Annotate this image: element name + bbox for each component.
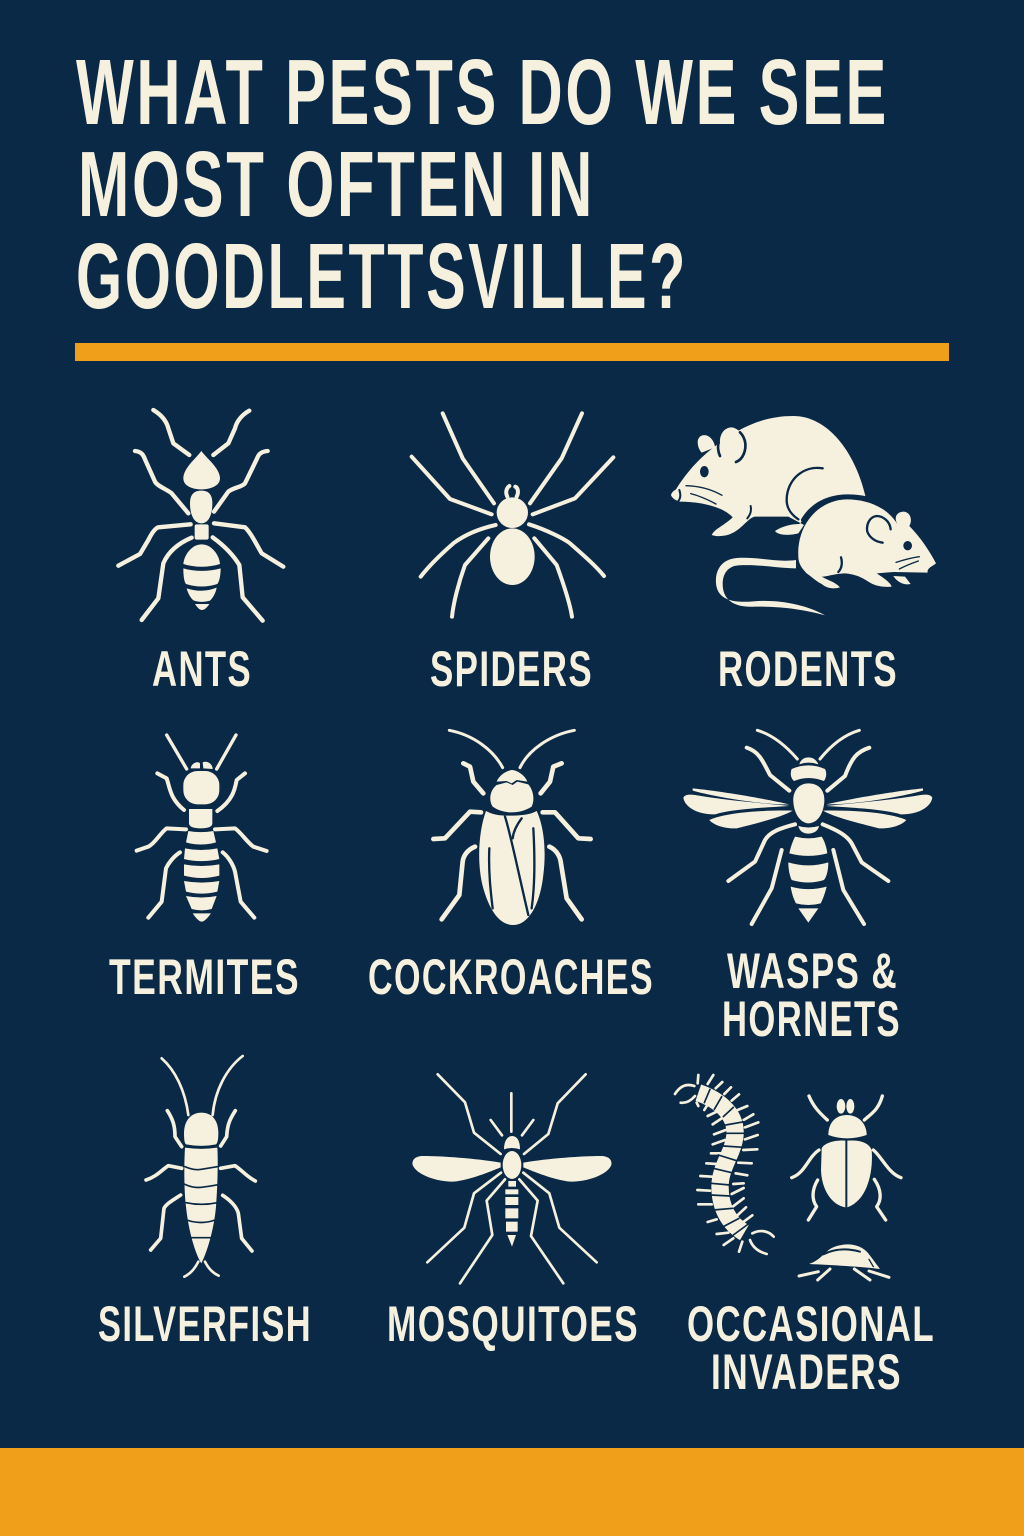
icon: ant <box>118 410 283 621</box>
title: GOODLETTSVILLE? <box>76 224 688 328</box>
divider bar <box>75 343 949 361</box>
icon: rat and mouse <box>671 416 936 615</box>
label: cockroaches: COCKROACHES <box>368 949 654 1005</box>
label: termites: TERMITES <box>109 949 300 1005</box>
icon: spider <box>412 413 613 617</box>
icon: termite <box>137 735 267 922</box>
label: spiders: SPIDERS <box>430 641 593 697</box>
panel: occasional invaders <box>675 1075 935 1400</box>
icon: small bug <box>799 1244 889 1280</box>
label: mosquitoes: MOSQUITOES <box>387 1296 639 1352</box>
icon: beetle <box>792 1096 901 1220</box>
icon: cockroach <box>433 730 591 925</box>
panel: wasps and hornets <box>683 730 932 1047</box>
footer band <box>0 1448 1024 1536</box>
label: rodents: RODENTS <box>718 641 898 697</box>
icon: silverfish <box>146 1056 255 1277</box>
label: wasps and hornets: WASPS & <box>727 943 898 999</box>
title <box>76 40 889 328</box>
panel: rodents <box>671 416 936 697</box>
label: occasional invaders <box>687 1296 935 1400</box>
panel: termites <box>109 735 300 1005</box>
label: wasps and hornets <box>722 943 901 1047</box>
label: wasps and hornets: HORNETS <box>722 991 901 1047</box>
label: silverfish: SILVERFISH <box>98 1296 312 1352</box>
label: ants: ANTS <box>152 641 252 697</box>
icon: centipede, beetle and bug <box>675 1075 901 1280</box>
icon: centipede <box>675 1075 774 1254</box>
panel: silverfish <box>98 1056 312 1352</box>
title: MOST OFTEN IN <box>78 132 595 236</box>
rat tail <box>716 558 825 615</box>
panel: mosquitoes <box>387 1074 639 1352</box>
panel: ants <box>118 410 283 697</box>
icon: mosquito <box>412 1074 612 1283</box>
panel: cockroaches <box>368 730 654 1005</box>
icon: wasp <box>683 730 932 924</box>
panel: spiders <box>412 413 613 697</box>
label: occasional invaders: INVADERS <box>711 1344 902 1400</box>
